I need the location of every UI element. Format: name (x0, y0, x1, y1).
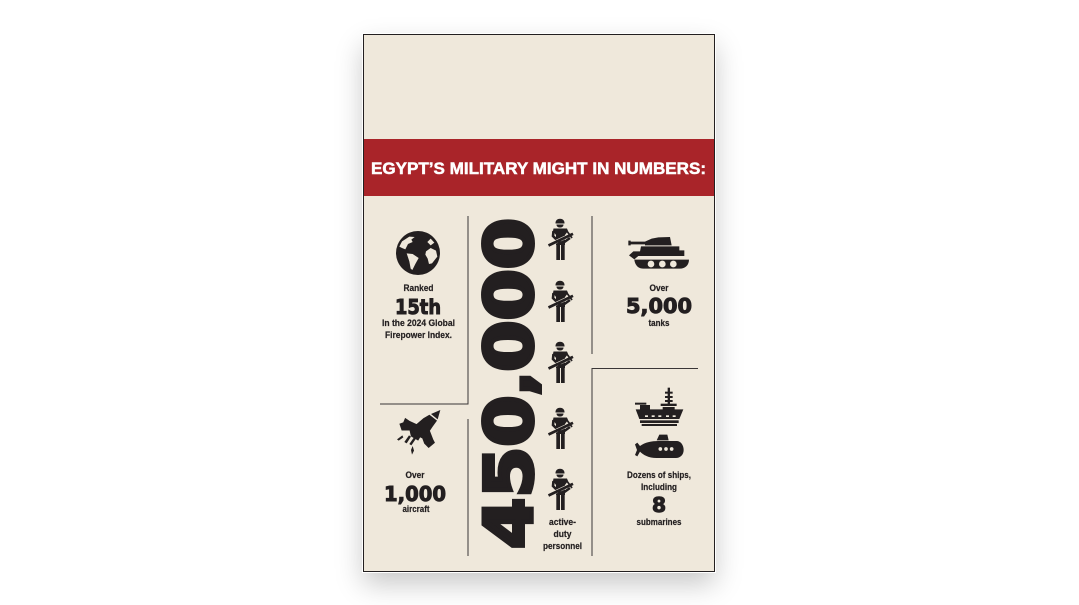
text: active-duty personnel: duty (554, 529, 572, 539)
panel: global ranking (382, 231, 455, 340)
stat: 1,000: 1,000 (384, 482, 446, 506)
text: aircraft: aircraft (402, 504, 430, 514)
text: active-duty personnel (543, 517, 582, 551)
icon: tank (628, 237, 689, 269)
icon: fighter jet (397, 410, 440, 455)
text: including: Including (641, 482, 677, 492)
text: index line 2: Firepower Index. (385, 330, 452, 340)
icon: warship (635, 388, 683, 426)
icon: soldier 3 (548, 342, 574, 383)
text: active-duty personnel: active- (549, 517, 576, 527)
icon: globe (396, 231, 440, 275)
text: tanks: tanks (648, 318, 670, 328)
icon: soldier 1 (548, 219, 574, 260)
panel: aircraft (384, 410, 446, 514)
panel: personnel (471, 218, 582, 551)
icon: soldier 2 (548, 281, 574, 322)
text: active-duty personnel: personnel (543, 541, 582, 551)
stat: 8: 8 (652, 493, 666, 517)
stat: 5,000: 5,000 (626, 294, 692, 318)
stat: 450,000 vertical: 450,000 (471, 218, 548, 549)
stat: 15th: 15th (395, 295, 441, 319)
text: ranked: Ranked (404, 283, 434, 293)
poster card background (363, 34, 715, 572)
text: dozens of ships: Dozens of ships, (627, 470, 691, 480)
icon: submarine (635, 435, 684, 458)
panel: tanks (626, 237, 692, 328)
text: over: Over (406, 470, 425, 480)
panel: ships and submarines (627, 388, 691, 527)
icon: soldier 4 (548, 408, 574, 449)
title: EGYPT’S MILITARY MIGHT IN NUMBERS: (371, 159, 706, 178)
text: submarines: submarines (636, 517, 682, 527)
icon: soldier 5 (548, 469, 574, 510)
title banner (364, 139, 714, 196)
text: index line 1: In the 2024 Global (382, 318, 455, 328)
text: over: Over (650, 283, 669, 293)
